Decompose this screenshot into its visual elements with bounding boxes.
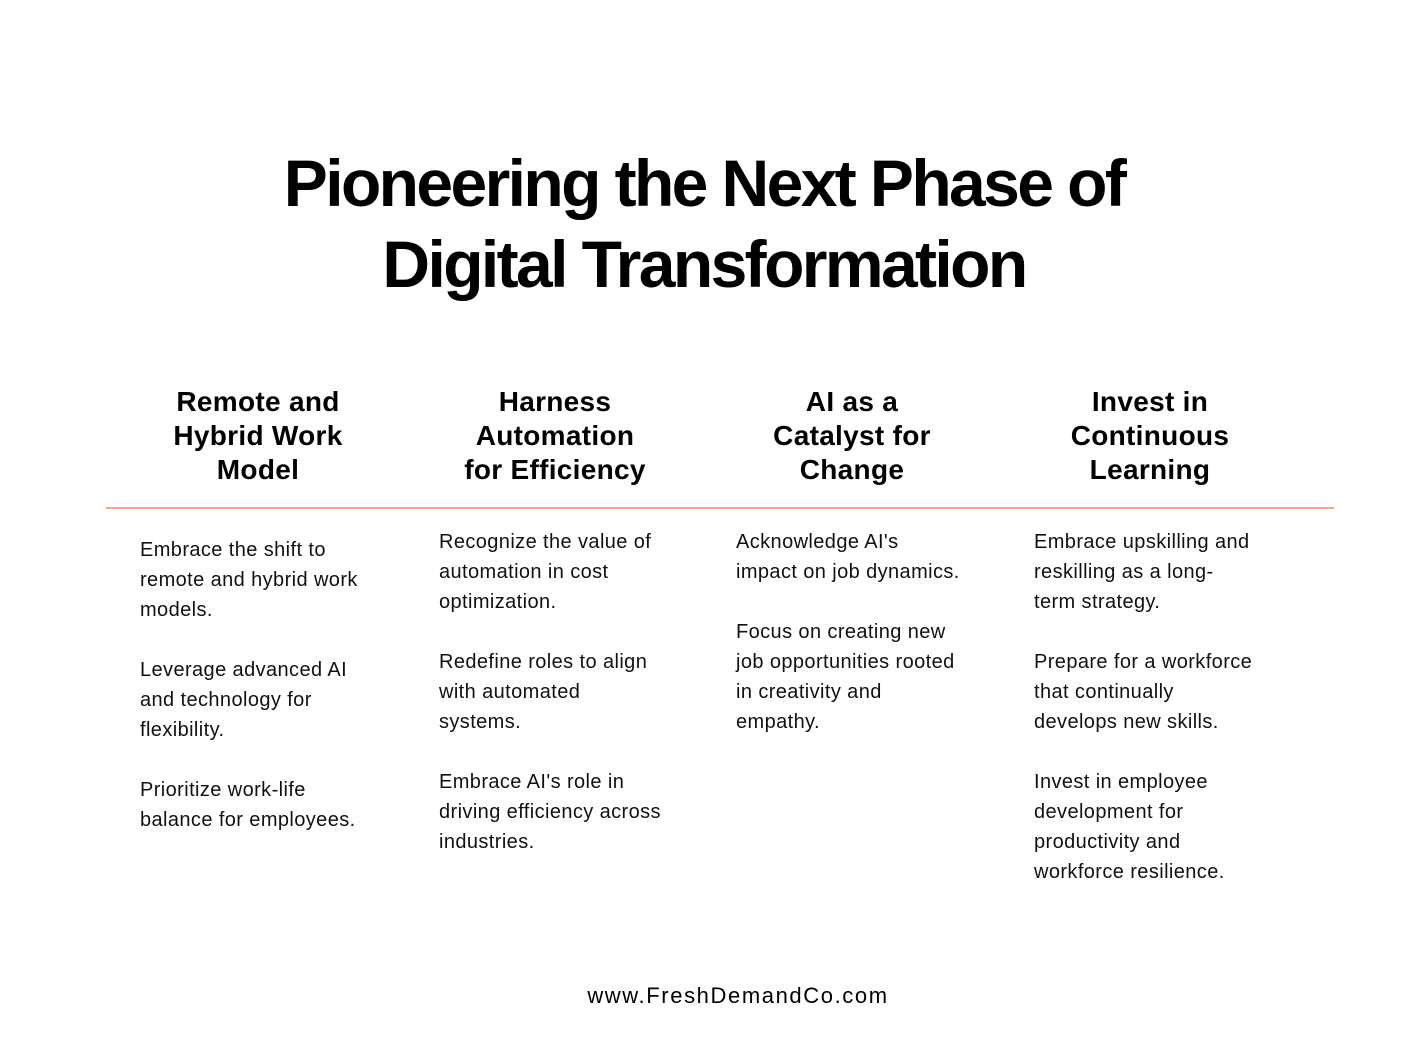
text block: AI catalyst: job opportunities rooted (736, 651, 955, 673)
heading: remote and hybrid (173, 386, 343, 485)
text block: remote and hybrid: flexibility. (140, 719, 224, 741)
text block: continuous learning: Prepare for a workforce (1034, 651, 1252, 673)
footer url: www.FreshDemandCo.com (587, 983, 889, 1008)
text block: automation: Redefine roles to align (439, 651, 647, 673)
text block: continuous learning: workforce resilience. (1034, 861, 1225, 883)
heading: AI catalyst (773, 386, 931, 485)
text block: continuous learning: reskilling as a long- (1034, 561, 1214, 583)
heading: automation: Automation (476, 420, 634, 451)
text block: remote and hybrid: Leverage advanced AI (140, 659, 347, 681)
text block: remote and hybrid (140, 539, 358, 831)
title: Digital Transformation (382, 227, 1026, 301)
text block: automation: with automated (439, 681, 580, 703)
text block: automation: Embrace AI's role in (439, 771, 624, 793)
text block: continuous learning: productivity and (1034, 831, 1180, 853)
heading: continuous learning: Invest in (1092, 386, 1208, 417)
title: Pioneering the Next Phase of (284, 146, 1124, 220)
text block: automation: Recognize the value of (439, 531, 651, 553)
heading: automation: Harness (499, 386, 611, 417)
text block: remote and hybrid: Embrace the shift to (140, 539, 326, 561)
text block: continuous learning: development for (1034, 801, 1183, 823)
text block: remote and hybrid: remote and hybrid work (140, 569, 358, 591)
text block: automation: industries. (439, 831, 535, 853)
heading: continuous learning (1071, 386, 1229, 485)
heading: AI catalyst: Change (800, 454, 904, 485)
text block: remote and hybrid: models. (140, 599, 213, 621)
heading: remote and hybrid: Model (217, 454, 299, 485)
text block: automation: systems. (439, 711, 521, 733)
title (284, 146, 1127, 301)
heading: continuous learning: Continuous (1071, 420, 1229, 451)
text block: AI catalyst: Focus on creating new (736, 621, 946, 643)
text block: remote and hybrid: and technology for (140, 689, 312, 711)
text block: automation (439, 531, 661, 853)
text block: continuous learning: that continually (1034, 681, 1174, 703)
text block: remote and hybrid: Prioritize work-life (140, 779, 306, 801)
text block: continuous learning: develops new skills. (1034, 711, 1219, 733)
text block: continuous learning: term strategy. (1034, 591, 1160, 613)
text block: AI catalyst (736, 531, 960, 733)
text block: remote and hybrid: balance for employees. (140, 809, 356, 831)
text block: automation: driving efficiency across (439, 801, 661, 823)
text block: AI catalyst: impact on job dynamics. (736, 561, 960, 583)
text block: continuous learning: Embrace upskilling and (1034, 531, 1250, 553)
text block: continuous learning: Invest in employee (1034, 771, 1208, 793)
text block: automation: automation in cost (439, 561, 609, 583)
text block: automation: optimization. (439, 591, 556, 613)
heading: remote and hybrid: Remote and (176, 386, 340, 417)
text block: AI catalyst: Acknowledge AI's (736, 531, 899, 553)
text block: AI catalyst: in creativity and (736, 681, 882, 703)
heading: AI catalyst: AI as a (806, 386, 898, 417)
heading: automation: for Efficiency (464, 454, 646, 485)
heading: continuous learning: Learning (1090, 454, 1210, 485)
heading: automation (464, 386, 646, 485)
heading: remote and hybrid: Hybrid Work (173, 420, 343, 451)
heading: AI catalyst: Catalyst for (773, 420, 931, 451)
text block: continuous learning (1034, 531, 1252, 883)
text block: AI catalyst: empathy. (736, 711, 820, 733)
